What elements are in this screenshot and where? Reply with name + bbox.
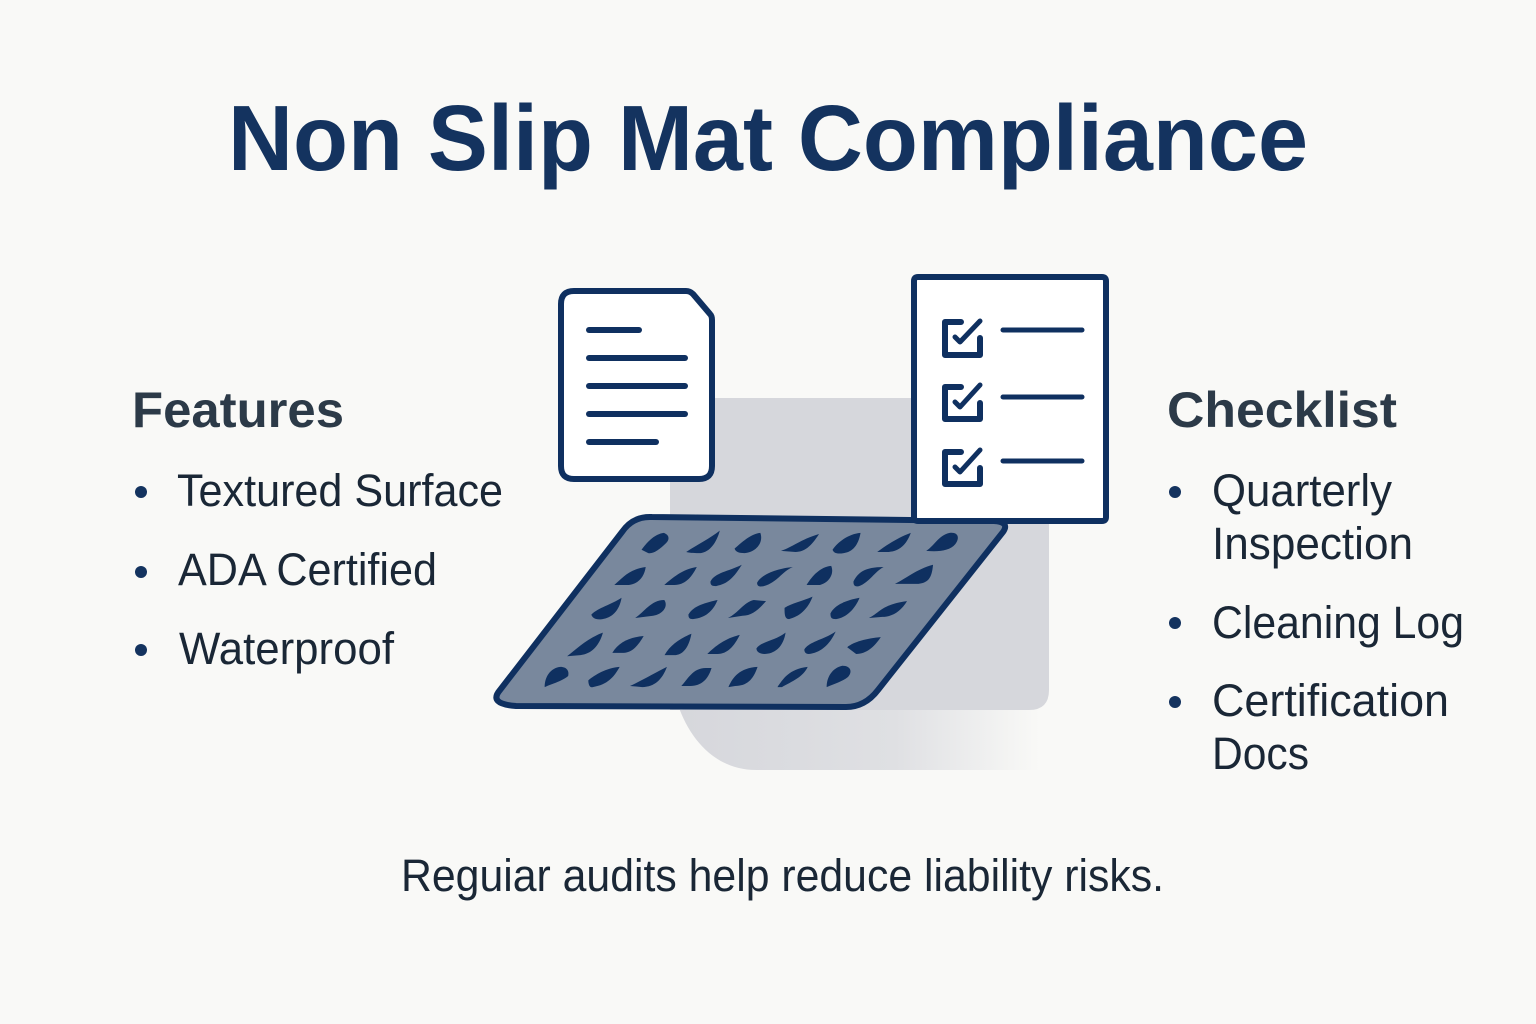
title: Non Slip Mat Compliance [228, 86, 1308, 190]
list item: textured surface: Textured Surface [177, 465, 503, 516]
list item: quarterly inspection: Quarterly [1212, 465, 1392, 516]
checklist row 1 [945, 321, 1082, 355]
list item: quarterly inspection [1169, 465, 1413, 569]
heading: features: Features [132, 382, 344, 438]
list item: certification docs: Certification [1212, 675, 1449, 726]
panel: features [132, 382, 503, 674]
list item: cleaning log: Cleaning Log [1212, 597, 1464, 648]
icon: checklist [914, 277, 1106, 521]
list item: waterproof: Waterproof [179, 623, 394, 674]
icon: non-slip mat [496, 517, 1005, 707]
list item: certification docs: Docs [1212, 728, 1309, 779]
checklist row 2 [945, 385, 1082, 419]
panel: checklist [1167, 382, 1464, 779]
list item: ada certified: ADA Certified [178, 544, 437, 595]
icon: document [561, 291, 712, 479]
footer note: Reguiar audits help reduce liability risks. [401, 850, 1164, 901]
list item: certification docs [1169, 675, 1449, 779]
heading: checklist: Checklist [1167, 382, 1397, 438]
list item: quarterly inspection: Inspection [1212, 518, 1413, 569]
checklist row 3 [945, 450, 1082, 484]
backdrop shape [670, 398, 1049, 770]
